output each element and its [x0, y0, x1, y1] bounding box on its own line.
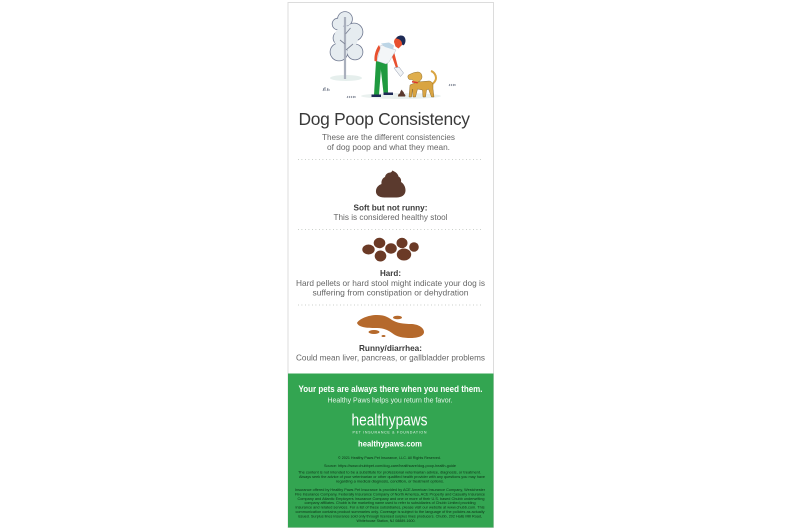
- fine print: copyright and source: Source: https://www.chubbpet.com/dog-care/healthcare/dog-poop-health-guide: [324, 463, 457, 468]
- intro text: [322, 133, 455, 152]
- fine print: insurance disclosure: Whitehouse Station, NJ 08889-1600.: [356, 518, 416, 523]
- ground shadow: [361, 93, 441, 99]
- footer subheading: Healthy Paws helps you return the favor.: [328, 396, 453, 404]
- icon: grass tufts: [323, 84, 455, 98]
- description: suffering from constipation or dehydration: [312, 288, 469, 298]
- description: Hard pellets or hard stool might indicate your dog is: [296, 279, 485, 288]
- logo: healthypaws: healthypaws: [352, 412, 428, 430]
- icon: small poop on ground: [398, 90, 405, 96]
- panel: green footer: [288, 374, 494, 528]
- icon: golden dog: [408, 71, 436, 97]
- section: soft but not runny: [334, 170, 448, 222]
- illustration: man and dog in a park: [323, 11, 455, 99]
- description: Could mean liver, pancreas, or gallbladder problems: [296, 354, 485, 362]
- fine print: insurance disclosure: Insurance offered by Healthy Paws Pet Insurance is provided by ACE American Insurance Company, Westchester: [295, 487, 486, 492]
- label: Hard:: [380, 269, 401, 278]
- label: Soft but not runny:: [354, 204, 428, 212]
- panel: page card: [288, 2, 494, 528]
- fine print: insurance disclosure: issued. Surplus lines insurance sold only through licensed surplus lines producers. Chubb, 202 Halls Mill Road,: [298, 513, 482, 518]
- icon: runny puddle: [357, 315, 424, 338]
- intro text: These are the different consistencies: [322, 133, 455, 142]
- logo: healthypaws: PET INSURANCE & FOUNDATION: [352, 430, 427, 434]
- fine print: copyright and source: The content is not intended to be a substitute for professional veterinarian advice, diagnosis, or treatment.: [298, 470, 481, 474]
- description: This is considered healthy stool: [334, 213, 448, 222]
- intro text: of dog poop and what they mean.: [327, 143, 450, 152]
- website: healthypaws.com: [358, 440, 422, 448]
- description: [296, 279, 485, 298]
- logo: healthypaws: [352, 412, 428, 434]
- fine print: insurance disclosure: insurance and related services. For a list of these subsidiaries, please visit our website at www.chubb.com. This: [296, 505, 484, 510]
- fine print: copyright and source: [298, 455, 486, 484]
- fine print: insurance disclosure: Fire Insurance Company, Federally Insurance Company of North America, ACE Property and Casualty Insurance: [295, 491, 486, 496]
- fine print: insurance disclosure: company affiliates. Chubb is the marketing name used to refer to subsidiaries of Chubb Limited providing: [304, 500, 476, 505]
- fine print: copyright and source: Always seek the advice of your veterinarian or other qualified health provider with any questions you may have: [299, 474, 486, 479]
- section: hard: [296, 238, 485, 298]
- label: Runny/diarrhea:: [359, 344, 422, 353]
- fine print: insurance disclosure: [295, 487, 486, 523]
- icon: tree: [330, 11, 363, 81]
- footer headline: Your pets are always there when you need them.: [298, 384, 482, 394]
- icon: hard pellets: [362, 238, 419, 262]
- fine print: copyright and source: © 2021 Healthy Paws Pet Insurance, LLC. All Rights Reserved.: [338, 455, 441, 460]
- fine print: copyright and source: regarding a medical diagnosis, condition, or treatment options.: [336, 478, 444, 484]
- section: runny: [296, 315, 485, 362]
- icon: healthy poop swirl: [376, 170, 406, 198]
- title: Dog Poop Consistency: [298, 109, 470, 129]
- fine print: insurance disclosure: Company and Atlantic Employers Insurance Company and one or more of their U.S. based Chubb underwriting: [298, 496, 484, 501]
- icon: man bending over: [372, 35, 406, 97]
- fine print: insurance disclosure: communication contains product summaries only. Coverage is subject to the language of the policies as actually: [296, 509, 484, 514]
